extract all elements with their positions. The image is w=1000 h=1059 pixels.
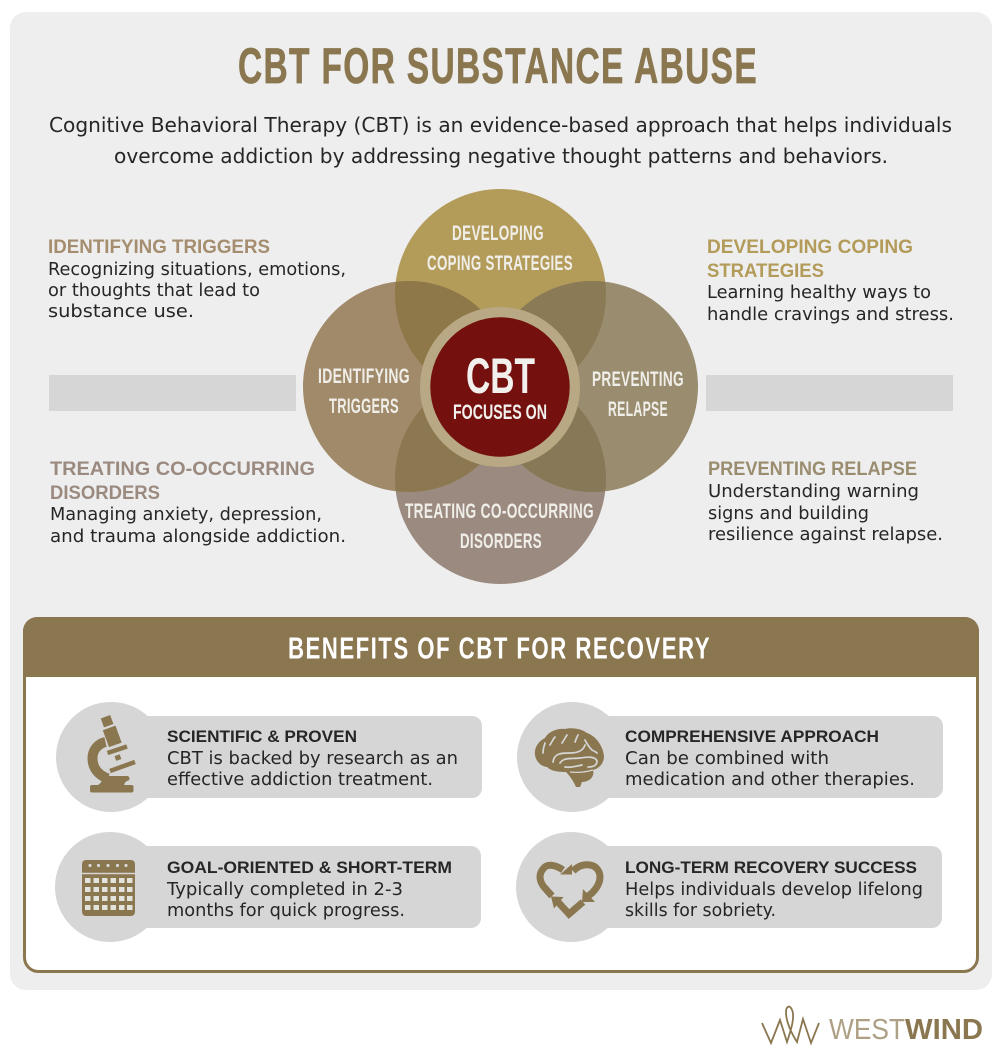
benefit text: months for quick progress. [167, 901, 405, 921]
benefit text: CBT is backed by research as an [167, 749, 458, 769]
text block: identifying triggers: or thoughts that lead to [48, 281, 260, 301]
logo: Westwind [762, 1007, 983, 1046]
icon: brain [535, 728, 604, 787]
label: treating co-occurring disorders: DISORDERS [460, 530, 542, 553]
center disc [430, 317, 570, 457]
overlaps [395, 281, 606, 492]
benefit text: LONG-TERM RECOVERY SUCCESS [625, 858, 917, 877]
benefit text [625, 727, 915, 790]
label: developing coping strategies: DEVELOPING [452, 222, 544, 245]
circle: identifying triggers [303, 281, 514, 492]
text block: treating co-occurring disorders: Managing anxiety, depression, [50, 505, 322, 525]
text block: identifying triggers: IDENTIFYING TRIGGERS [48, 236, 270, 258]
circle: treating co-occurring disorders [395, 373, 606, 584]
label: preventing relapse [592, 368, 684, 421]
circle: preventing relapse [487, 281, 698, 492]
intro text [49, 113, 952, 168]
text block: identifying triggers: Recognizing situations, emotions, [48, 260, 346, 280]
text block: treating co-occurring disorders: and trauma alongside addiction. [50, 527, 346, 547]
benefit: long-term recovery success [516, 832, 942, 942]
intro text: Cognitive Behavioral Therapy (CBT) is an evidence-based approach that helps individuals [49, 113, 952, 137]
benefit text [166, 858, 452, 921]
text block: treating co-occurring disorders: TREATING CO-OCCURRING [50, 458, 315, 480]
text block: treating co-occurring disorders: DISORDERS [50, 482, 160, 504]
icon: calendar [82, 860, 135, 916]
benefit text: GOAL-ORIENTED & SHORT-TERM [167, 858, 452, 877]
text block: identifying triggers: substance use. [48, 302, 194, 322]
intro text: overcome addiction by addressing negative thought patterns and behaviors. [114, 144, 888, 168]
title: CBT FOR SUBSTANCE ABUSE [238, 38, 758, 94]
right connector bar [706, 375, 953, 411]
icon: microscope [90, 715, 135, 792]
label: identifying triggers [318, 365, 410, 418]
benefit: goal-oriented and short-term [55, 832, 481, 942]
label: developing coping strategies: COPING STRATEGIES [427, 252, 573, 275]
center ring [420, 307, 580, 467]
benefit text: Can be combined with [625, 749, 829, 769]
center label: CBT [466, 348, 535, 404]
benefit text: COMPREHENSIVE APPROACH [625, 727, 879, 746]
benefit text: Typically completed in 2-3 [166, 880, 403, 900]
panel: benefits [23, 617, 979, 972]
text block: preventing relapse: signs and building [708, 504, 869, 524]
label: treating co-occurring disorders: TREATING CO-OCCURRING [405, 500, 594, 523]
text block: preventing relapse: PREVENTING RELAPSE [708, 458, 917, 480]
logo wordmark: WEST [829, 1014, 905, 1046]
benefit text: effective addiction treatment. [167, 770, 433, 790]
icon: recycling heart [540, 864, 600, 914]
label: treating co-occurring disorders [405, 500, 594, 553]
label: preventing relapse: PREVENTING [592, 368, 684, 391]
label: developing coping strategies [427, 222, 573, 275]
text block: developing coping strategies: DEVELOPING COPING [707, 236, 913, 258]
benefits header band [23, 617, 979, 677]
left connector bar [49, 375, 296, 411]
circle: developing coping strategies [395, 189, 606, 400]
logo wordmark: WIND [905, 1014, 983, 1046]
label: identifying triggers: TRIGGERS [329, 395, 399, 418]
text block: developing coping strategies: STRATEGIES [707, 260, 824, 282]
text block: preventing relapse: Understanding warning [708, 482, 919, 502]
text block: treating co-occurring disorders [50, 458, 346, 547]
benefit text: medication and other therapies. [625, 770, 915, 790]
center label: FOCUSES ON [453, 401, 547, 424]
benefit text: skills for sobriety. [625, 901, 776, 921]
logo wordmark [829, 1014, 983, 1046]
benefit text: SCIENTIFIC & PROVEN [167, 727, 357, 746]
venn diagram [303, 189, 698, 584]
benefit: scientific and proven [56, 702, 482, 812]
benefit: comprehensive approach [517, 702, 943, 812]
text block: preventing relapse [708, 458, 943, 545]
text block: developing coping strategies: Learning healthy ways to [707, 283, 931, 303]
benefits heading: BENEFITS OF CBT FOR RECOVERY [288, 630, 711, 666]
logo mark [762, 1007, 819, 1043]
label: identifying triggers: IDENTIFYING [318, 365, 410, 388]
benefit text [625, 858, 923, 921]
text block: preventing relapse: resilience against relapse. [708, 525, 943, 545]
text block: identifying triggers [48, 236, 346, 322]
text block: developing coping strategies [707, 236, 954, 325]
center label [453, 348, 547, 424]
label: preventing relapse: RELAPSE [608, 398, 668, 421]
text block: developing coping strategies: handle cravings and stress. [707, 305, 954, 325]
benefit text: Helps individuals develop lifelong [625, 880, 923, 900]
benefit text [167, 727, 458, 790]
